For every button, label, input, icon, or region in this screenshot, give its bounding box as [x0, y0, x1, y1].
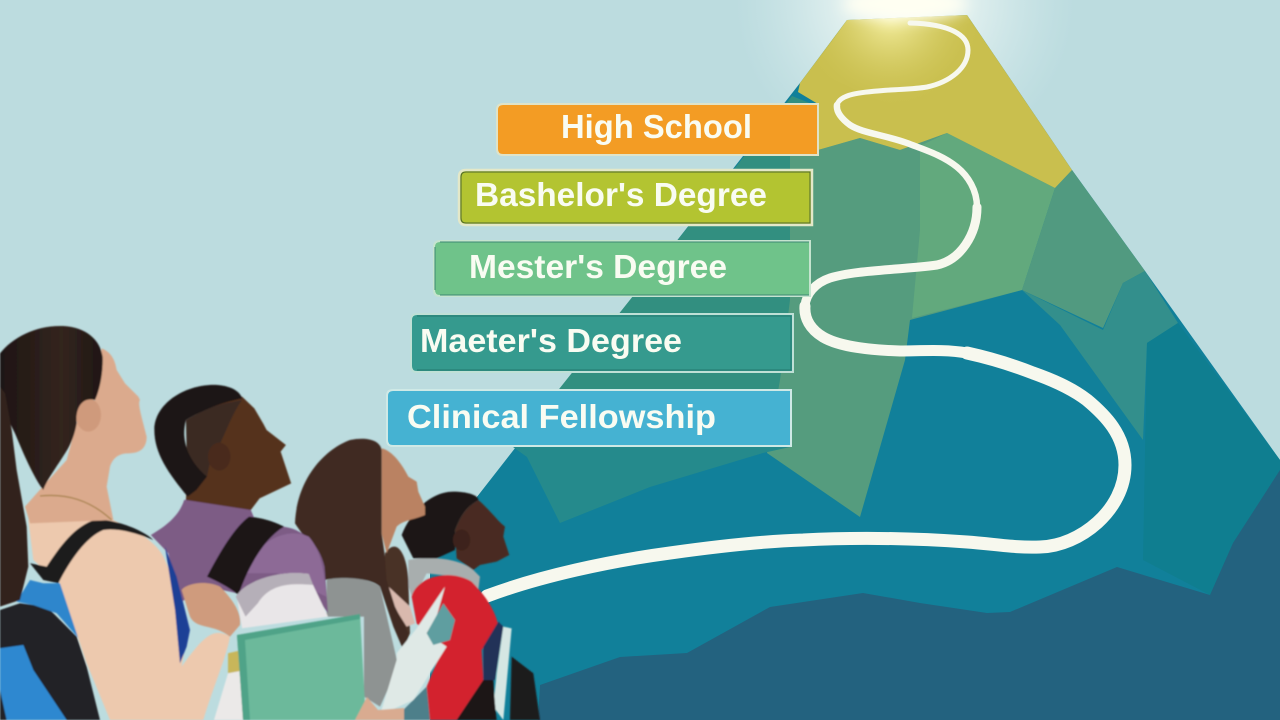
mountain facet: lighter green: [912, 133, 1055, 318]
label: Maeter's Degree: Maeter's Degree: [420, 322, 682, 359]
label: Mester's Degree: Mester's Degree: [469, 248, 727, 285]
mountain facet: yellow summit: [798, 15, 1072, 188]
mountain: [430, 15, 1280, 720]
mountain facet: left green-teal band: [513, 96, 812, 450]
mountain facet: teal block: [1143, 323, 1280, 600]
label: Mester's Degree: [434, 241, 810, 296]
label: High School: [497, 104, 818, 155]
mountain facet: main green: [767, 133, 1055, 517]
foothills: dark blue: [538, 470, 1280, 720]
label: Maeter's Degree: [411, 314, 793, 372]
label: Bashelor's Degree: Bashelor's Degree: [475, 176, 767, 213]
student 2: man with purple sweater: [151, 385, 328, 720]
label: High School: High School: [561, 108, 752, 145]
winding white path: [487, 23, 1125, 596]
bundle carried by student 2: [237, 573, 328, 628]
student 1: woman with peach sweater: [0, 326, 240, 720]
hand on folder: [355, 697, 404, 720]
students group: [0, 326, 540, 720]
student 3: woman with grey jacket: [295, 439, 455, 720]
green folder: [237, 614, 365, 720]
summit highlight: [812, 15, 990, 110]
label: Clinical Fellowship: Clinical Fellowship: [407, 398, 716, 435]
label: Bashelor's Degree: [459, 170, 812, 225]
label: Clinical Fellowship: [387, 390, 791, 446]
mountain facet: lower-left teal-green: [513, 447, 790, 523]
mountain base: teal: [430, 15, 1280, 720]
sun glare at summit: [843, 0, 967, 20]
summit glow: [700, 0, 1100, 180]
mountain facet: right green: [1022, 170, 1145, 328]
mountain facet: mid teal: [1022, 271, 1178, 440]
student 4: far right, red backpack: [402, 492, 540, 720]
